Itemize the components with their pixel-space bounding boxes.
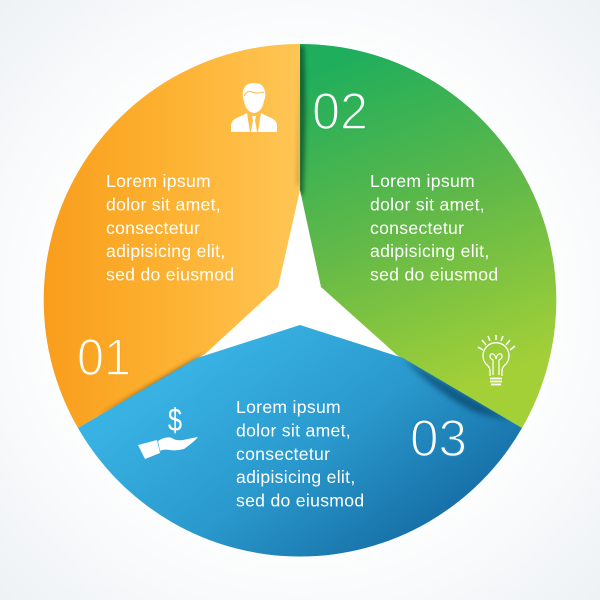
icon: light bulb (478, 335, 515, 384)
text block 03: Lorem ipsum (236, 397, 341, 417)
icon: businessman (231, 83, 277, 132)
text block 02: consectetur (370, 218, 464, 238)
text block 01: Lorem ipsum (106, 171, 211, 191)
panel: 01 orange segment (44, 44, 300, 428)
text block 02: dolor sit amet, (370, 194, 485, 214)
text block 03: adipisicing elit, (236, 467, 356, 487)
text block 02: Lorem ipsum (370, 171, 475, 191)
text block 02: adipisicing elit, (370, 241, 490, 261)
text block 01: adipisicing elit, (106, 241, 226, 261)
text block 03: consectetur (236, 444, 330, 464)
text block 01: dolor sit amet, (106, 194, 221, 214)
number 03: 03 (410, 410, 467, 468)
text block 03: dolor sit amet, (236, 420, 351, 440)
number 01: 01 (77, 329, 131, 387)
text block 02: sed do eiusmod (370, 264, 498, 284)
text block 01: consectetur (106, 218, 200, 238)
panel: 03 blue segment (78, 325, 522, 557)
text block 03: sed do eiusmod (236, 490, 364, 510)
panel: 02 green segment (298, 44, 556, 428)
icon: hand with dollar: $ (168, 403, 182, 439)
number 02: 02 (312, 83, 368, 141)
text block 01: sed do eiusmod (106, 264, 234, 284)
icon: hand with dollar (138, 403, 198, 459)
